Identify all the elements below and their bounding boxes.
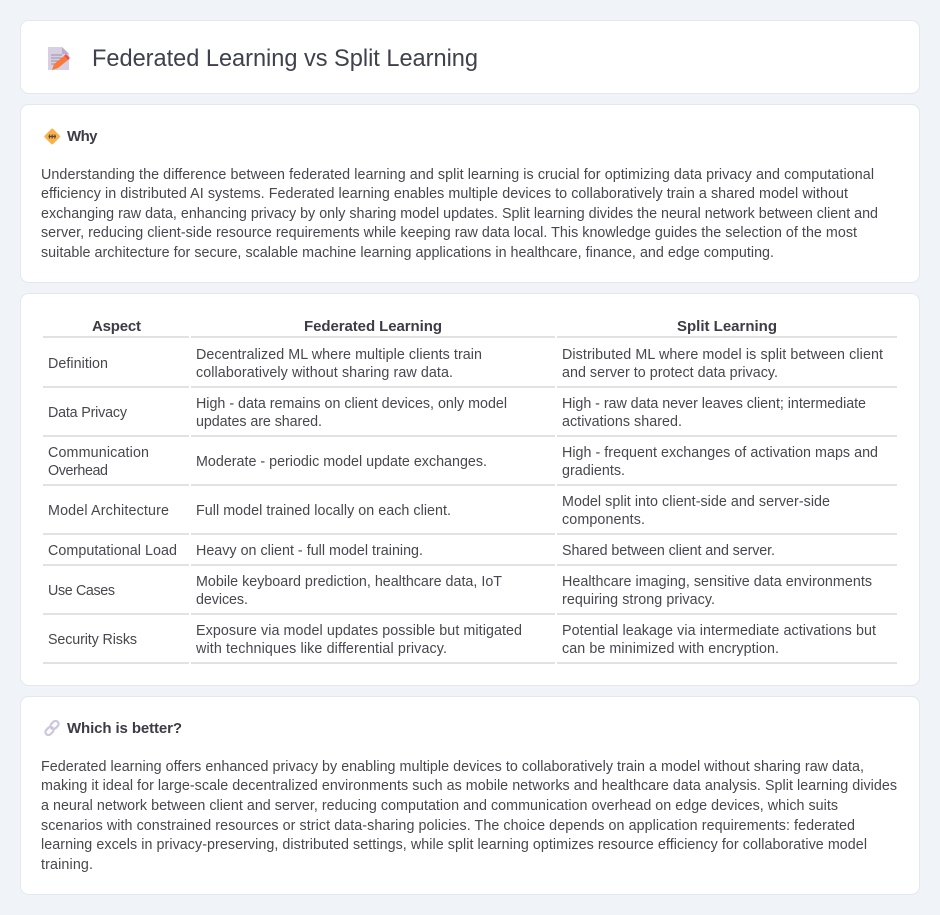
row: use cases: requiring strong privacy. <box>562 592 715 608</box>
row: model architecture <box>48 494 830 528</box>
row: definition: Decentralized ML where multiple clients train <box>196 347 482 363</box>
panel: which is better <box>20 696 920 894</box>
row: communication overhead: High - frequent exchanges of activation maps and <box>562 445 878 461</box>
which is better text: learning excels in privacy-preserving, distributed settings, while split learning optimizes resource efficiency for collaborative model <box>41 837 867 853</box>
table header row: Federated Learning <box>304 318 442 335</box>
row: definition: and server to protect data privacy. <box>562 365 778 381</box>
which is better text: making it ideal for large-scale decentralized environments such as mobile networks and healthcare data analysis. Split learning divides <box>41 778 897 794</box>
why text: exchanging raw data, enhancing privacy by only sharing model updates. Split learning divides the neural network between client and <box>41 206 878 222</box>
row: security risks: with techniques like differential privacy. <box>195 641 447 657</box>
why text: suitable architecture for secure, scalable machine learning applications in healthcare, finance, and edge computing. <box>41 245 774 261</box>
which is better text <box>41 759 897 873</box>
row: data privacy: High - raw data never leaves client; intermediate <box>562 396 866 412</box>
row: data privacy: High - data remains on client devices, only model <box>196 396 507 412</box>
row: model architecture: Full model trained locally on each client. <box>196 503 451 519</box>
row: definition <box>48 347 883 381</box>
row: definition: collaboratively without sharing raw data. <box>196 365 453 381</box>
panel: comparison table <box>20 294 920 686</box>
icon: link <box>44 720 60 736</box>
row: security risks: can be minimized with encryption. <box>562 641 779 657</box>
panel: why <box>20 104 920 282</box>
which is better text: scenarios with constrained resources or strict data-sharing policies. The choice depends on application requirements: federated <box>41 818 855 834</box>
row: communication overhead: Communication <box>48 445 149 461</box>
row: model architecture: Model split into client-side and server-side <box>562 494 830 510</box>
row: data privacy: Data Privacy <box>48 405 128 421</box>
row: computational load: Heavy on client - full model training. <box>196 543 423 559</box>
table header row: Split Learning <box>677 318 777 335</box>
row: use cases <box>48 574 872 608</box>
row: data privacy: updates are shared. <box>196 414 322 430</box>
heading: which is better: Which is better? <box>67 720 182 737</box>
row: security risks: Security Risks <box>48 632 137 648</box>
row: communication overhead: gradients. <box>562 463 625 479</box>
which is better text: Federated learning offers enhanced privacy by enabling multiple devices to collaboratively train a model without sharing raw data, <box>41 759 864 775</box>
row: computational load <box>48 543 775 559</box>
row: computational load: Computational Load <box>48 543 177 559</box>
row: communication overhead: Moderate - periodic model update exchanges. <box>196 454 487 470</box>
row: definition: Definition <box>48 356 108 372</box>
row: data privacy: activations shared. <box>562 414 682 430</box>
row: definition: Distributed ML where model is split between client <box>562 347 883 363</box>
panel: title <box>20 20 920 94</box>
table header row: Aspect <box>92 318 141 335</box>
row: computational load: Shared between client and server. <box>562 543 775 559</box>
title text: Federated Learning vs Split Learning <box>92 46 478 72</box>
row: data privacy <box>48 396 866 430</box>
why text: Understanding the difference between federated learning and split learning is crucial for optimizing data privacy and computational <box>41 167 874 183</box>
why text <box>41 167 878 261</box>
row: communication overhead: Overhead <box>48 463 108 479</box>
icon: memo <box>48 47 70 70</box>
heading: why: Why <box>67 128 98 145</box>
row: use cases: Use Cases <box>48 583 115 599</box>
row: use cases: devices. <box>196 592 248 608</box>
icon: warning diamond <box>44 128 61 145</box>
row: model architecture: components. <box>562 512 645 528</box>
why text: efficiency in distributed AI systems. Federated learning enables multiple devices to collaboratively train a shared model without <box>41 186 848 202</box>
row: use cases: Healthcare imaging, sensitive data environments <box>562 574 872 590</box>
why text: server, reducing client-side resource requirements while keeping raw data local. This knowledge guides the selection of the most <box>41 225 857 241</box>
row: security risks: Potential leakage via intermediate activations but <box>562 623 876 639</box>
row: security risks <box>48 623 876 657</box>
which is better text: training. <box>41 857 93 873</box>
which is better text: a neural network between client and server, reducing computation and communication overhead on edge devices, which suits <box>41 798 838 814</box>
row: use cases: Mobile keyboard prediction, healthcare data, IoT <box>196 574 502 590</box>
row: communication overhead <box>48 445 878 479</box>
row: security risks: Exposure via model updates possible but mitigated <box>196 623 522 639</box>
row: model architecture: Model Architecture <box>48 503 169 519</box>
table header row <box>92 318 777 335</box>
